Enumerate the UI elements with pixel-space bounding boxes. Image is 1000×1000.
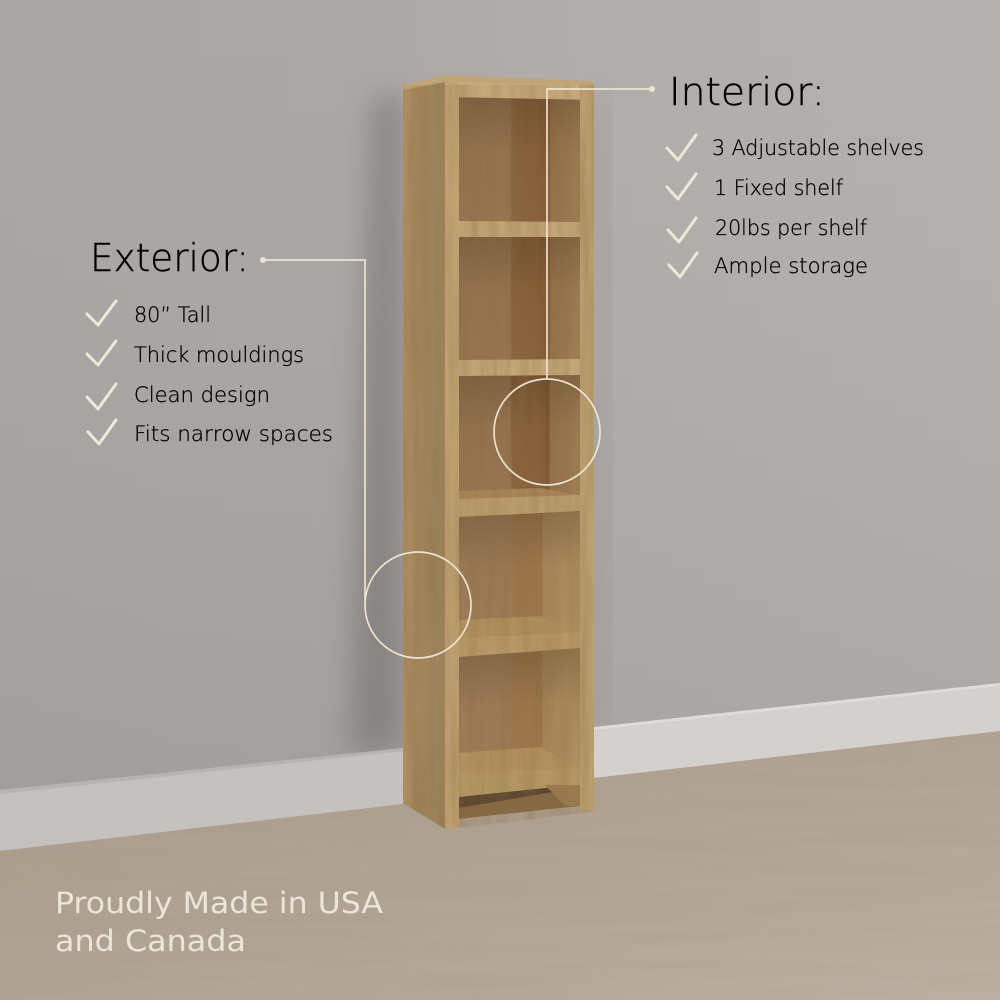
bookcase left side panel (403, 82, 445, 829)
icon: check (667, 135, 696, 160)
item: 3 Adjustable shelves (712, 136, 924, 160)
front frame top rail (445, 82, 594, 100)
baseboard left (0, 748, 403, 851)
wood grain overlay (403, 85, 594, 829)
front right stile (580, 84, 594, 812)
icon: check (87, 301, 116, 325)
plinth recess (459, 785, 580, 829)
item: Clean design (134, 383, 270, 407)
baseboard right (594, 683, 1000, 778)
item: Thick mouldings (134, 343, 304, 367)
footer text: and Canada (55, 924, 246, 958)
floor (0, 731, 1000, 1000)
compartment backs (459, 97, 580, 773)
icon: check (669, 253, 697, 277)
footer text: Proudly Made in USA (55, 886, 383, 920)
heading: exterior: Exterior: (90, 236, 249, 280)
icon: check (87, 384, 116, 409)
exterior list (87, 301, 333, 446)
callout: exterior connector (260, 257, 471, 658)
icon: check (88, 420, 116, 444)
front left stile (445, 82, 459, 829)
icon: check (668, 218, 696, 242)
item: 80” Tall (134, 303, 211, 327)
callout: interior connector (494, 86, 655, 485)
item: Fits narrow spaces (134, 422, 333, 446)
item: 20lbs per shelf (715, 216, 868, 240)
footer text (55, 886, 383, 958)
icon: check (87, 341, 116, 365)
item: 1 Fixed shelf (714, 176, 844, 200)
shelf top surfaces (459, 488, 580, 772)
item: Ample storage (714, 254, 868, 278)
bookcase top cap (402, 75, 593, 98)
heading: interior: Interior: (669, 70, 825, 114)
interior list (667, 135, 924, 278)
icon: check (667, 174, 696, 199)
shelf fronts (459, 221, 580, 798)
bookcase (402, 75, 594, 829)
